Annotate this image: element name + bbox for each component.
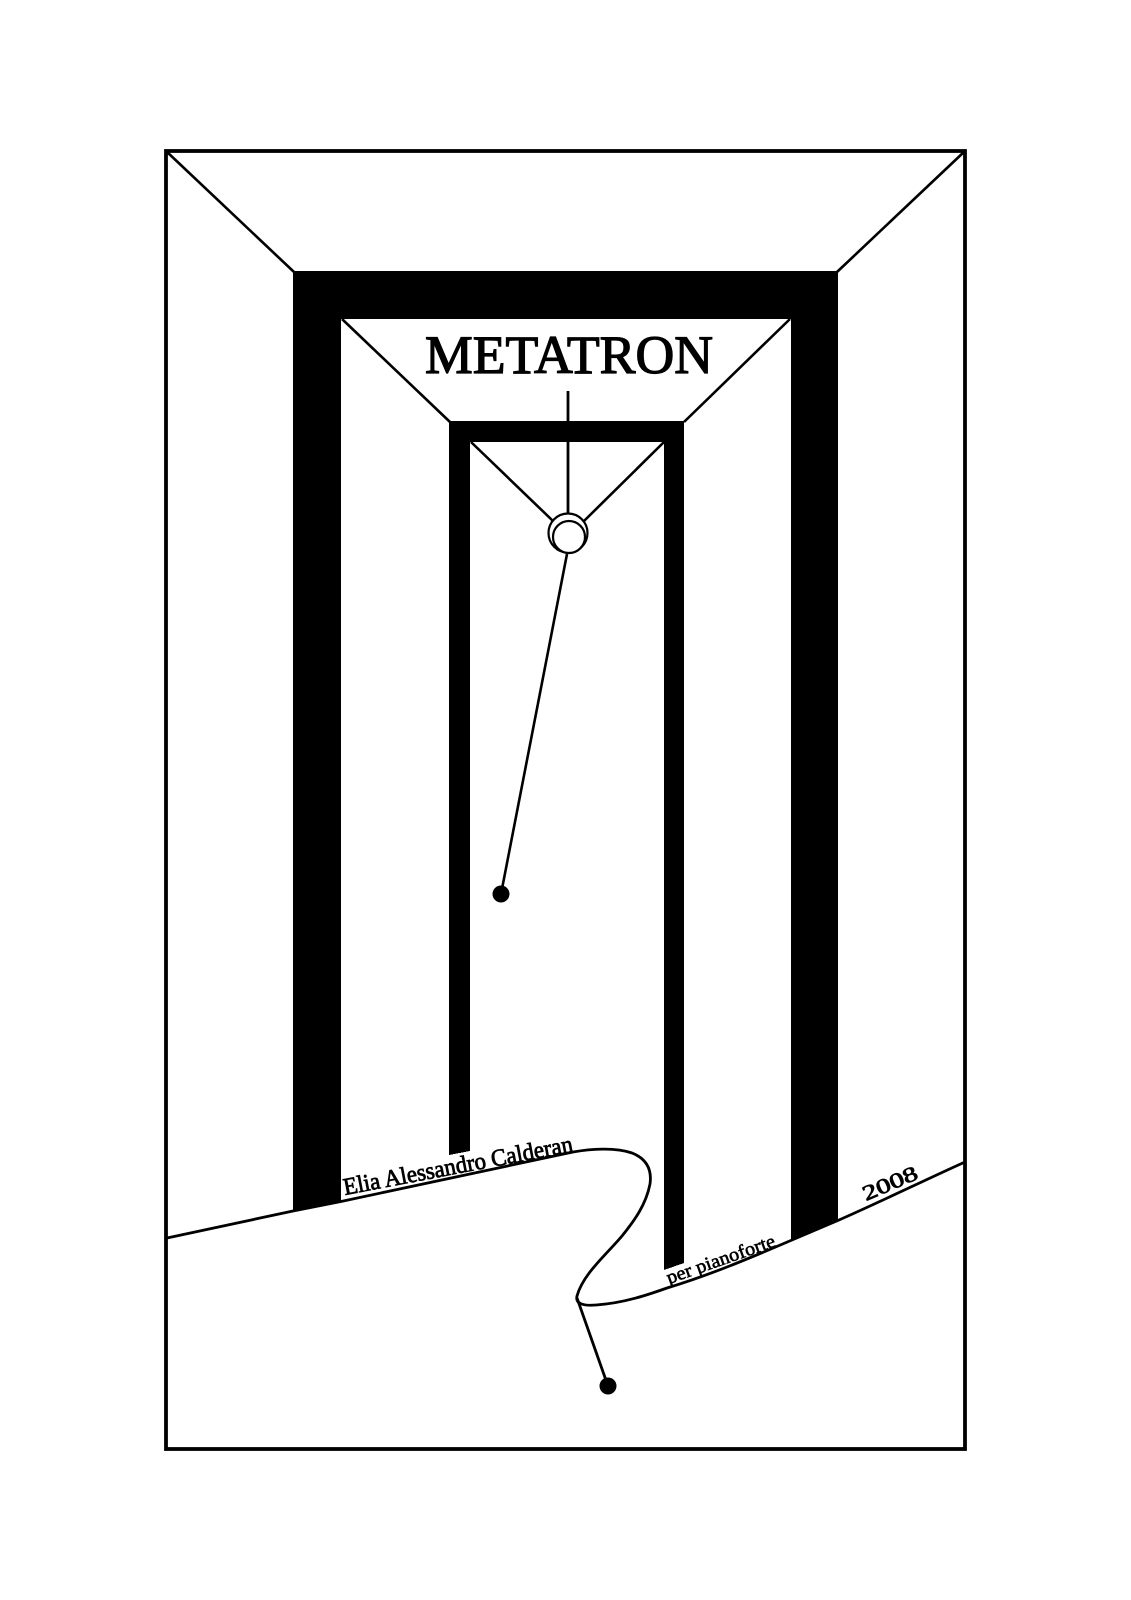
outer black portal bbox=[293, 271, 838, 1240]
year: 2008 bbox=[859, 1161, 921, 1206]
perspective lines: inner corners bbox=[471, 442, 664, 521]
author name: Elia Alessandro Calderan bbox=[341, 1132, 575, 1201]
pendulum: vertical cord bbox=[567, 391, 569, 513]
inner black portal bbox=[449, 421, 684, 1270]
pendulum: double ring bbox=[548, 514, 588, 553]
instrument label: per pianoforte bbox=[664, 1231, 778, 1289]
lower cord with weight bbox=[577, 1298, 616, 1394]
title: METATRON bbox=[425, 325, 713, 385]
ground curve bbox=[167, 1149, 965, 1305]
perspective lines: middle corners bbox=[342, 319, 790, 422]
outer frame bbox=[166, 151, 965, 1449]
pendulum: swinging arm with weight bbox=[492, 554, 567, 902]
perspective lines: outer corners bbox=[166, 151, 965, 272]
